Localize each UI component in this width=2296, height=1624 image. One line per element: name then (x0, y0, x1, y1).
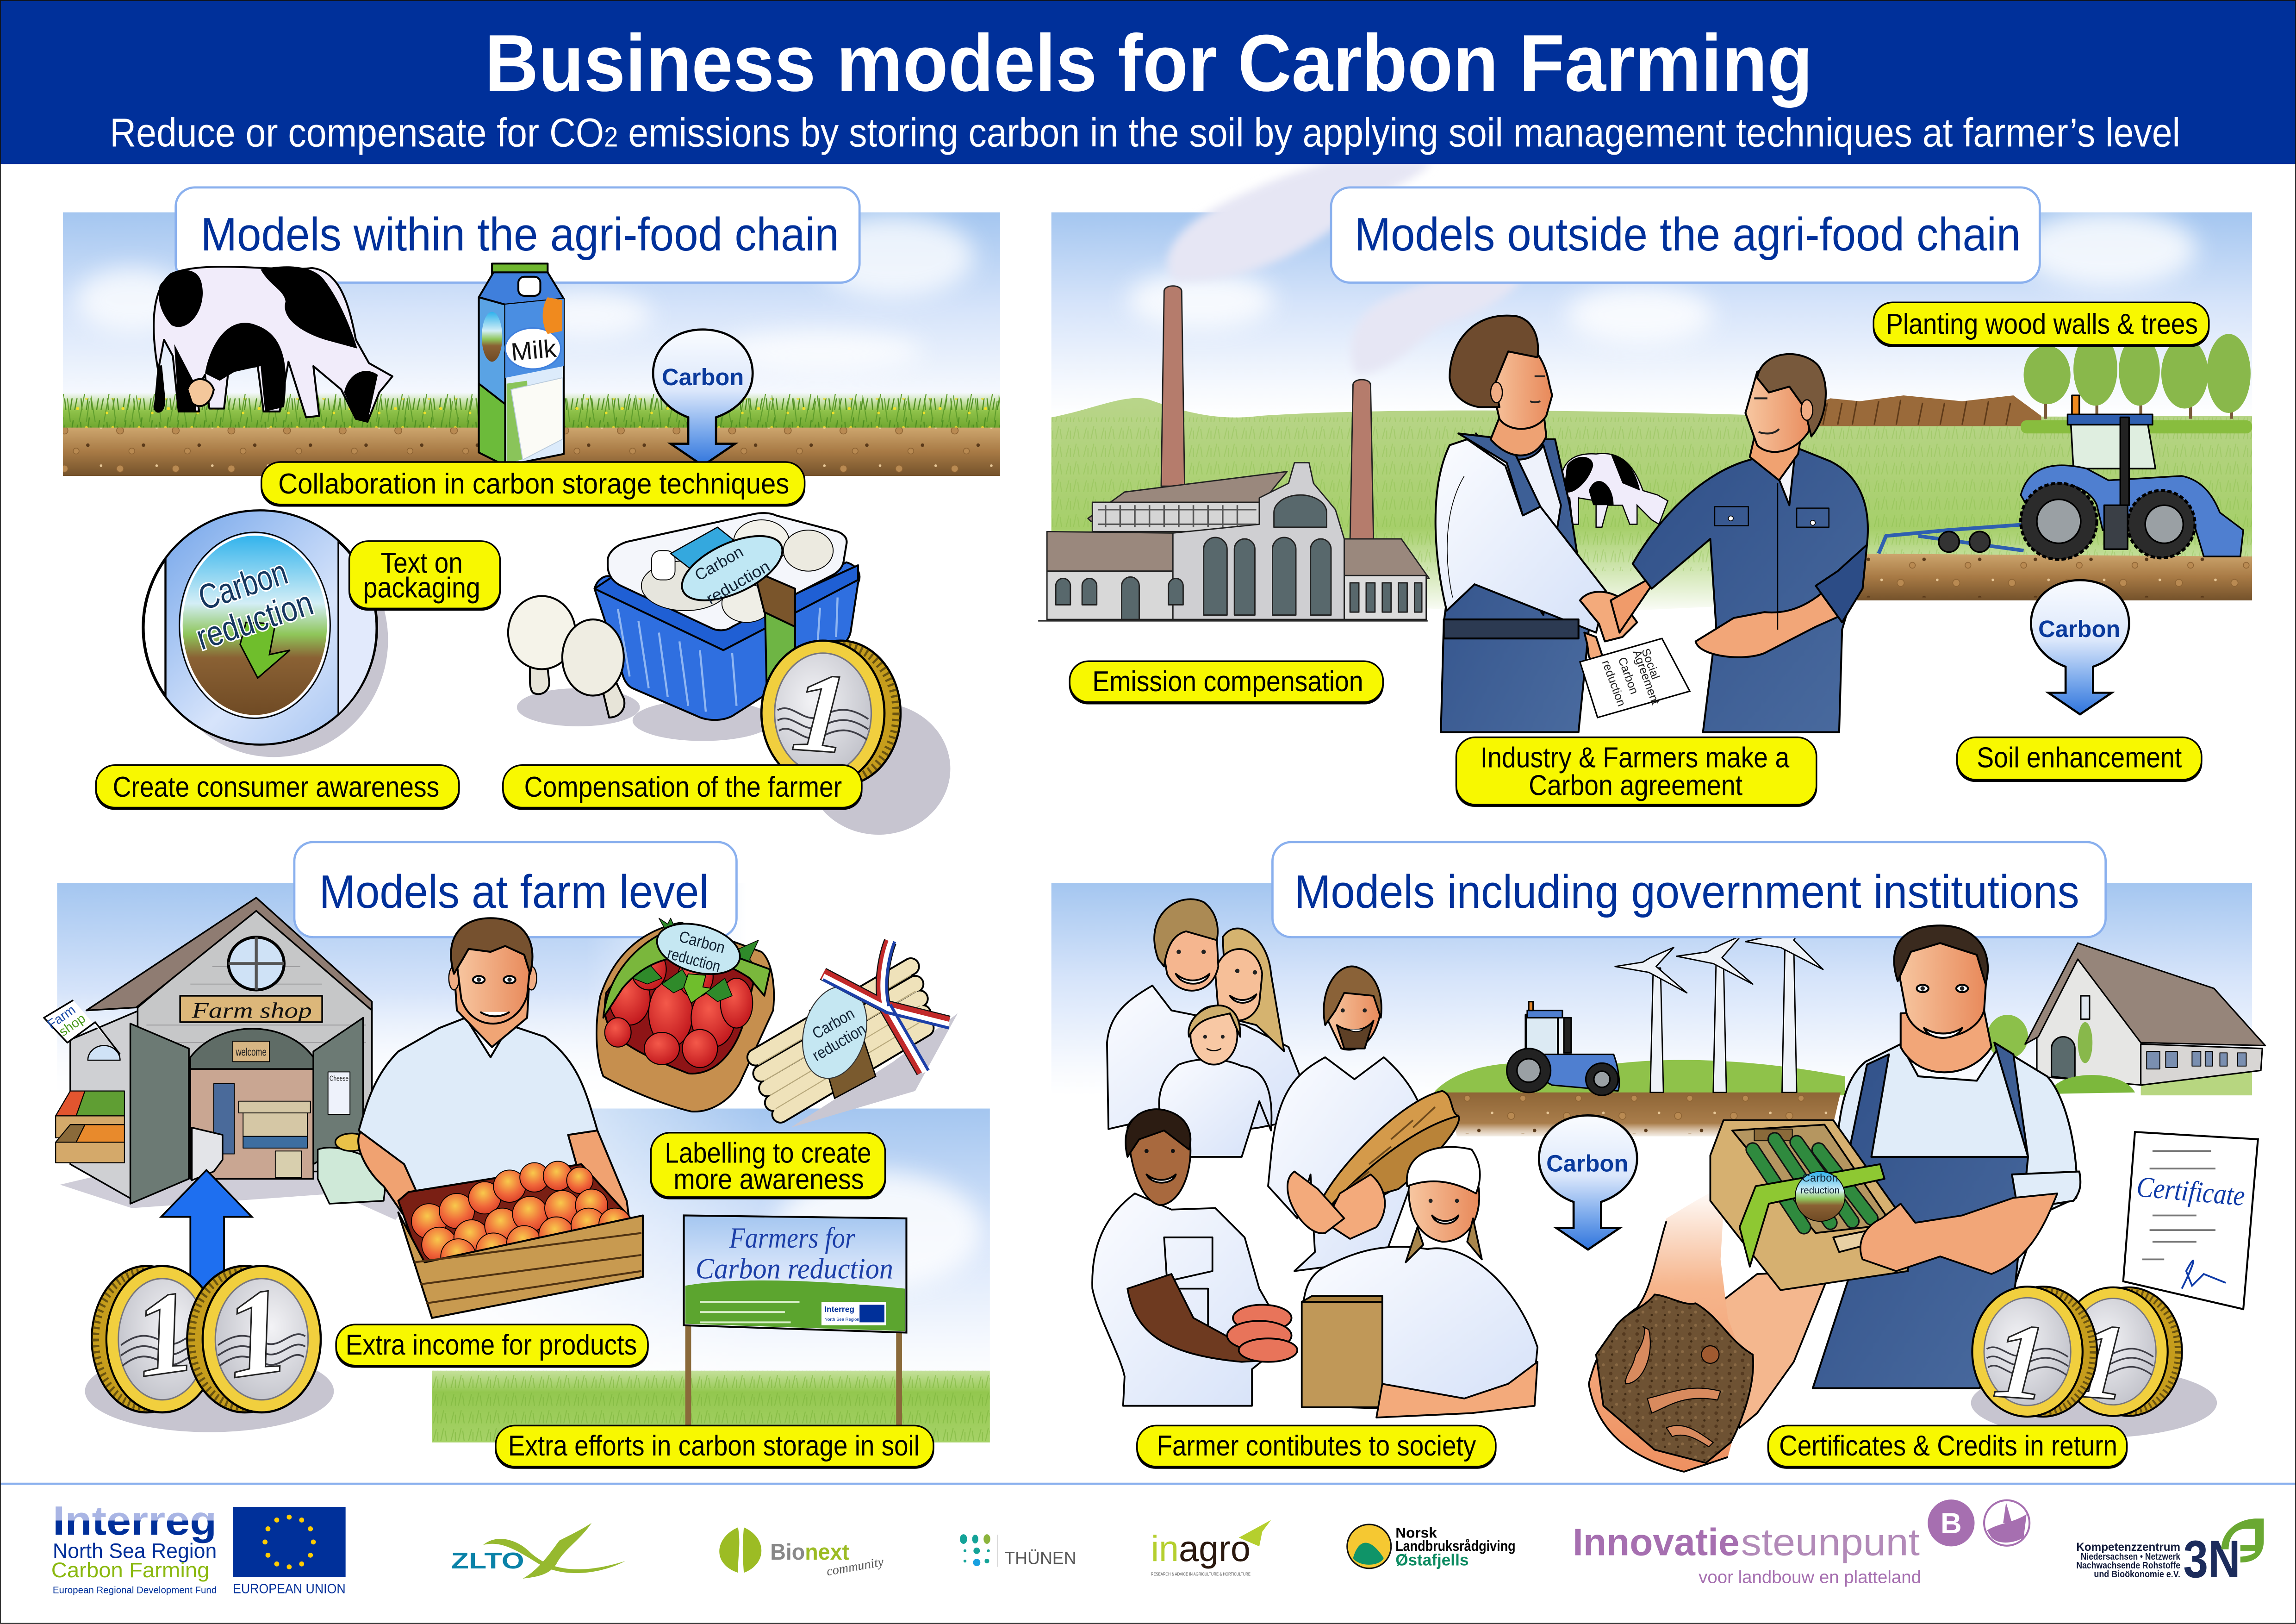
callout: soil enhancement (1956, 737, 2203, 782)
icon: agreement paper: Agreement (1630, 648, 1662, 706)
icon: agreement paper (1580, 638, 1690, 718)
icon: small cow (1561, 454, 1668, 527)
heading: within the agri-food chain: Models within the agri-food chain (200, 208, 839, 261)
icon: packaging label: reduction (192, 583, 318, 658)
icon: small tractor (1507, 1002, 1619, 1095)
icon: mushroom box (508, 513, 859, 741)
logo: 3N Kompetenzzentrum: 3N (2183, 1530, 2240, 1589)
callout: create consumer awareness (95, 765, 460, 810)
apples (411, 1161, 631, 1274)
logo: Innovatiesteunpunt: steunpunt (1741, 1521, 1920, 1563)
icon: carbon arrow (653, 330, 753, 466)
callout: labelling (650, 1133, 886, 1199)
logo: Norsk Landbruksrådgiving: Østafjells (1395, 1551, 1468, 1569)
logo: EU flag: EUROPEAN UNION (233, 1582, 346, 1597)
icon: farmer with apron (1813, 925, 2080, 1388)
icon: family (1107, 899, 1302, 1157)
heading: outside the agri-food chain: Models outside the agri-food chain (1355, 208, 2021, 261)
icon: milk carton: Milk (510, 335, 558, 366)
icon: certificate (2123, 1132, 2258, 1309)
logo: Norsk Landbruksrådgiving (1347, 1524, 1516, 1569)
logo: Norsk Landbruksrådgiving: Landbruksrådgiving (1395, 1537, 1516, 1554)
icon: asparagus bundle (756, 942, 958, 1128)
callout: extra income (336, 1324, 649, 1368)
icon: farmers sign: Carbon reduction (696, 1252, 893, 1285)
logo: Thünen (960, 1534, 1076, 1568)
logo: 3N Kompetenzzentrum: und Bioökonomie e.V. (2094, 1569, 2180, 1580)
callout: extra efforts (495, 1425, 934, 1469)
icon: farm shop: Farm shop (191, 999, 312, 1023)
callout: create consumer awareness: Create consumer awareness (113, 771, 439, 803)
callout: industry and farmers agreement: Carbon agreement (1529, 770, 1742, 802)
subtitle: Reduce or compensate for CO2 emissions by storing carbon in the soil by applying soil management techniques at farmer’s level (110, 110, 2180, 155)
icon: cucumber box: Carbon (1802, 1173, 1838, 1185)
icon: strawberry basket: reduction (666, 945, 722, 976)
logo: 3N Kompetenzzentrum: Niedersachsen • Netzwerk (2081, 1551, 2181, 1562)
arrow: income up (161, 1170, 252, 1289)
heading: outside the agri-food chain (1331, 187, 2040, 282)
callout: farmer contributes: Farmer contibutes to society (1157, 1430, 1476, 1462)
logo: Interreg: Interreg (53, 1498, 217, 1543)
logo: Interreg (51, 1498, 217, 1596)
smoke (1168, 161, 1523, 375)
logo: inagro: inagro (1151, 1528, 1251, 1569)
logo: 3N Kompetenzzentrum: Kompetenzzentrum (2076, 1541, 2180, 1554)
icon: factory (1038, 286, 1429, 621)
callout: labelling: more awareness (673, 1164, 864, 1196)
icon: shop worker with box (1302, 1147, 1537, 1418)
callout: planting wood walls and trees: Planting wood walls & trees (1886, 308, 2198, 340)
logo: ZLTO: ZLTO (451, 1549, 524, 1574)
icon: farmer hand on box (1860, 1193, 2057, 1274)
icon: agreement paper: Carbon (1615, 656, 1641, 696)
icon: coin (761, 641, 950, 835)
logo: Innovatiesteunpunt: Innovatie (1573, 1521, 1740, 1563)
icon: produce crates (56, 1091, 124, 1163)
icon: baker (1268, 966, 1459, 1271)
icon: cucumber box (1710, 1120, 1908, 1290)
icon: farm shop: welcome (236, 1047, 267, 1059)
panel: models within the agri-food chain (63, 187, 1000, 835)
heading: government institutions: Models including government institutions (1294, 866, 2079, 918)
logo: Innovatiesteunpunt: B (1941, 1507, 1962, 1540)
logo: Bionext: Bionext (770, 1540, 849, 1565)
icon: farmhouse (1987, 943, 2265, 1094)
icon: wind turbines (1615, 915, 1823, 1093)
logo: Thünen: THÜNEN (1004, 1549, 1076, 1568)
heading: government institutions (1272, 842, 2106, 937)
logo: Interreg: Carbon Farming (51, 1558, 209, 1582)
heading: within the agri-food chain (176, 187, 859, 282)
icon: carbon arrow (2031, 580, 2129, 714)
logo: Interreg: North Sea Region (53, 1539, 217, 1563)
heading: farm level (294, 842, 736, 937)
icon: carbon arrow (1539, 1115, 1637, 1249)
callout: industry and farmers agreement: Industry & Farmers make a (1481, 742, 1790, 774)
panel: models including government institutions (1052, 842, 2265, 1472)
icon: hands with soil (1589, 1186, 1830, 1472)
icon: two coins: 1 (126, 1265, 203, 1402)
callout: farmer contributes (1136, 1425, 1497, 1469)
callout: labelling: Labelling to create (665, 1137, 871, 1169)
icon: asparagus bundle: reduction (809, 1020, 869, 1065)
icon: label shadow (160, 523, 388, 757)
icon: strawberry basket (597, 915, 774, 1112)
logo: Innovatiesteunpunt (1573, 1499, 2029, 1587)
scene: soil and crop edge (1813, 395, 2252, 600)
scene: sky and meadow (1052, 161, 2252, 615)
logo: Norsk Landbruksrådgiving: Norsk (1395, 1524, 1437, 1541)
icon: butcher with meat (1092, 1109, 1297, 1406)
scene: upper sky (57, 883, 747, 1103)
footer divider (0, 1483, 2296, 1485)
icon: two coins: 1 (2070, 1299, 2133, 1424)
scene: sky, grass and soil (63, 212, 1000, 476)
icon: carbon arrow: Carbon (1546, 1150, 1628, 1177)
icon: farmer with apple crate (358, 918, 643, 1318)
icon: farmers sign: Interreg (824, 1305, 854, 1314)
icon: two coins: 1 (217, 1261, 297, 1405)
icon: packaging label (143, 510, 377, 744)
icon: farmers sign: North Sea Region (824, 1317, 859, 1322)
icon: farmers sign: Farmers for (729, 1222, 855, 1254)
callout: collaboration (261, 462, 805, 506)
callout: collaboration: Collaboration in carbon storage techniques (278, 468, 789, 500)
callout: certificates and credits (1767, 1425, 2128, 1469)
callout: emission compensation: Emission compensation (1092, 666, 1363, 698)
logo: Bionext (719, 1527, 885, 1579)
icon: mushroom box: reduction (703, 557, 773, 608)
callout: compensation of the farmer: Compensation of the farmer (524, 771, 842, 803)
icon: tractor with plow (1879, 395, 2243, 559)
icon: left man handshake (1436, 316, 1637, 732)
icon: farm shop (44, 898, 425, 1220)
callout: extra income: Extra income for products (346, 1329, 637, 1361)
scene: lower sky and field (432, 1109, 990, 1443)
callout: industry and farmers agreement (1456, 737, 1817, 807)
icon: trees (2024, 332, 2251, 419)
icon: cow (154, 266, 392, 422)
icon: milk carton (479, 263, 564, 466)
icon: farmers sign (684, 1215, 906, 1443)
logo: Bionext: community (825, 1555, 885, 1579)
callout: extra efforts: Extra efforts in carbon storage in soil (508, 1430, 920, 1462)
icon: packaging label: Carbon (194, 552, 292, 618)
logo: ZLTO (451, 1523, 625, 1579)
logo: 3N Kompetenzzentrum: Nachwachsende Rohstoffe (2076, 1560, 2180, 1571)
callout: certificates and credits: Certificates & Credits in return (1779, 1430, 2117, 1462)
logo: inagro (1151, 1520, 1271, 1577)
icon: agreement paper: Social (1639, 647, 1662, 681)
icon: carbon arrow: Carbon (662, 364, 744, 390)
heading: farm level: Models at farm level (319, 866, 709, 918)
icon: strawberry basket: Carbon (677, 928, 727, 957)
icon: two coins (1971, 1287, 2217, 1438)
icon: farm shop: shop (56, 1011, 88, 1039)
icon: right man handshake (1611, 354, 1868, 732)
callout: compensation of the farmer (502, 765, 863, 810)
callout: soil enhancement: Soil enhancement (1977, 742, 2182, 774)
title: Business models for Carbon Farming (485, 18, 1813, 108)
icon: cucumber box: reduction (1800, 1185, 1840, 1196)
icon: agreement paper: reduction (1599, 658, 1628, 708)
logo: Interreg: European Regional Development Fund (53, 1585, 217, 1596)
panel: models outside the agri-food chain (1038, 161, 2252, 807)
icon: asparagus bundle: Carbon (809, 1005, 858, 1043)
icon: carbon arrow: Carbon (2038, 616, 2120, 642)
callout: text on packaging (348, 541, 501, 611)
scene: sky, hills and soil (1052, 883, 2252, 1137)
header band (0, 0, 2296, 164)
footer: logos (51, 1498, 2264, 1597)
callout: text on packaging: packaging (363, 572, 480, 604)
icon: mushroom box: Carbon (692, 543, 747, 585)
logo: EU flag (233, 1507, 346, 1597)
icon: two coins: 1 (1990, 1299, 2052, 1424)
logo: inagro: RESEARCH & ADVICE IN AGRICULTURE & HORTICULTURE (1151, 1572, 1251, 1577)
callout: text on packaging: Text on (381, 547, 463, 579)
logo: 3N Kompetenzzentrum (2076, 1518, 2264, 1589)
icon: two coins (85, 1261, 334, 1432)
callout: planting wood walls and trees (1873, 302, 2209, 347)
icon: certificate: Certificate (2135, 1170, 2246, 1212)
panel: models at farm level (44, 842, 990, 1469)
icon: farm shop: Cheese (330, 1074, 348, 1082)
icon: farm shop: Farm (44, 1002, 78, 1032)
callout: emission compensation (1069, 661, 1384, 705)
logo: Innovatiesteunpunt: voor landbouw en platteland (1699, 1568, 1921, 1587)
icon: coin: 1 (788, 648, 854, 778)
